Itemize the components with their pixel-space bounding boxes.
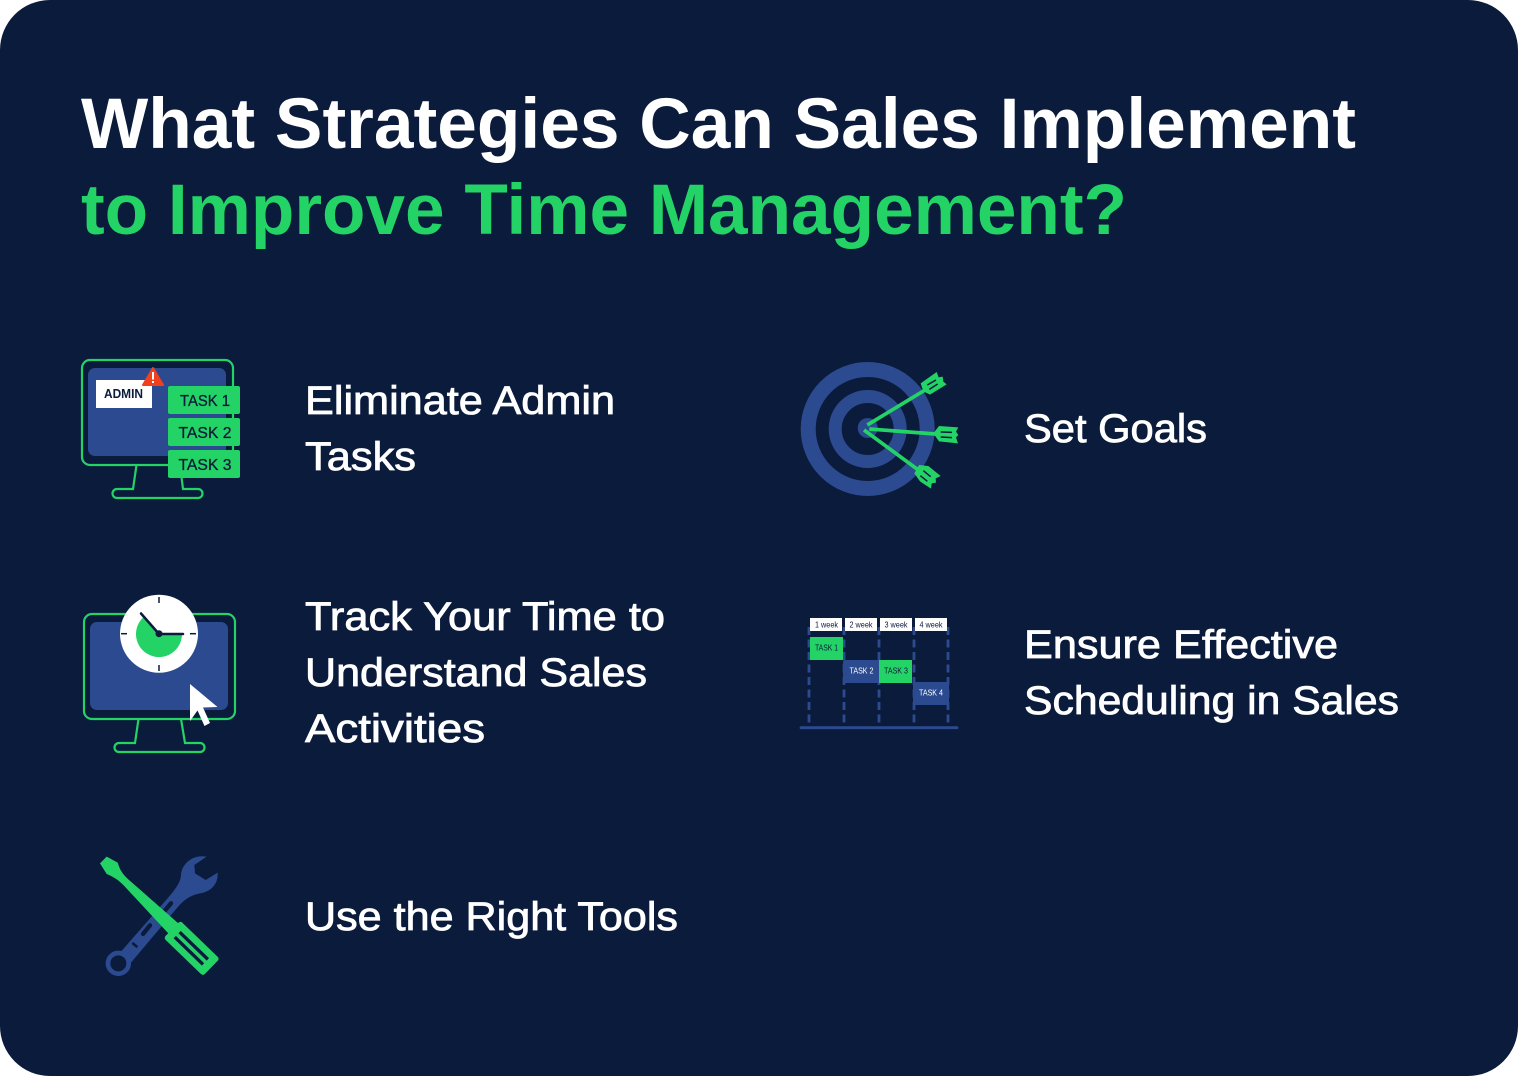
text: track your time: Track Your Time to [305, 595, 665, 639]
icon: weekly schedule chart: TASK 3 [884, 666, 908, 676]
text: eliminate admin tasks: Eliminate Admin [305, 379, 615, 423]
text: ensure effective scheduling [1024, 623, 1399, 723]
title: What Strategies Can Sales Implement [81, 85, 1356, 164]
icon: admin monitor with tasks: TASK 3 [178, 457, 232, 474]
icon: wrench and screwdriver [100, 856, 220, 976]
icon: weekly schedule chart: 4 week [920, 620, 943, 630]
text: track your time: Understand Sales [305, 651, 647, 695]
icon: admin monitor with tasks [82, 360, 240, 498]
text: set goals: Set Goals [1024, 407, 1207, 451]
title [81, 85, 1356, 250]
title: to Improve Time Management? [81, 171, 1127, 250]
icon: weekly schedule chart: 1 week [815, 620, 839, 630]
text: track your time [305, 595, 665, 751]
icon: monitor with clock and cursor [84, 595, 235, 752]
icon: admin monitor with tasks: ADMIN [104, 387, 143, 401]
text: use the right tools: Use the Right Tools [305, 895, 678, 939]
text: eliminate admin tasks: Tasks [305, 435, 416, 479]
text: eliminate admin tasks [305, 379, 615, 479]
icon: weekly schedule chart: 2 week [850, 620, 873, 630]
icon: admin monitor with tasks: TASK 2 [178, 425, 232, 442]
icon: weekly schedule chart: 3 week [884, 620, 908, 630]
text: ensure effective scheduling: Ensure Effective [1024, 623, 1338, 667]
icon: weekly schedule chart: TASK 1 [815, 644, 838, 652]
icon: weekly schedule chart [801, 618, 957, 728]
icon: admin monitor with tasks: TASK 1 [180, 393, 230, 410]
text: track your time: Activities [305, 707, 485, 751]
icon: target with arrows [808, 370, 958, 489]
text: ensure effective scheduling: Scheduling in Sales [1024, 679, 1399, 723]
icon: weekly schedule chart: TASK 4 [919, 688, 943, 698]
icon: weekly schedule chart: TASK 2 [850, 666, 874, 676]
